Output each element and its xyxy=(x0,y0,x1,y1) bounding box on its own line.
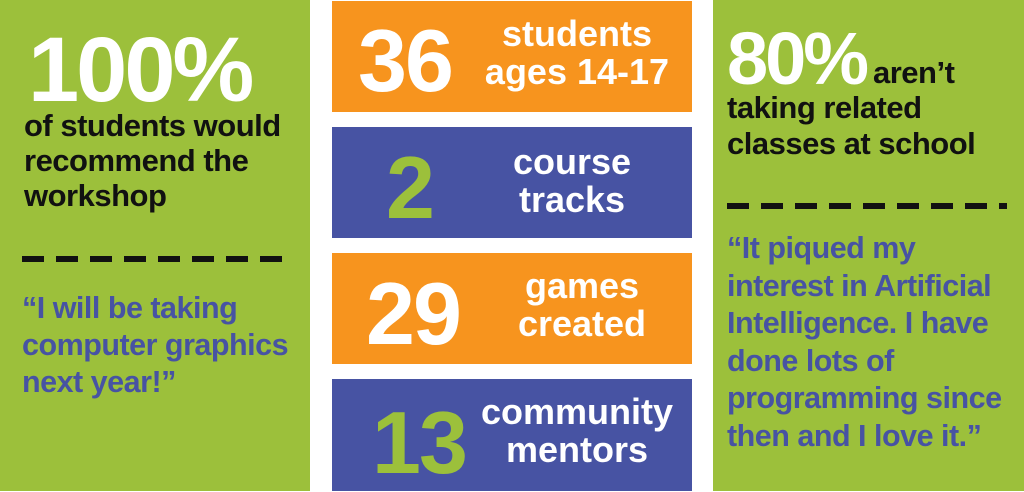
box: 29 games xyxy=(332,253,692,364)
panel: right green: taking related xyxy=(727,90,922,125)
box: 13 mentors: 13 xyxy=(372,393,466,492)
text: recommend: recommend the xyxy=(24,143,248,178)
quote right: “It piqued my xyxy=(727,231,915,265)
box: 2 course tracks: course xyxy=(513,141,631,182)
quote right: interest in Artificial xyxy=(727,268,991,302)
quote right: then and I love it.” xyxy=(727,418,981,452)
quote right: programming since xyxy=(727,381,1002,415)
text: recommend: workshop xyxy=(24,178,166,213)
box: 29 games: created xyxy=(518,303,646,344)
box: 13 mentors xyxy=(332,379,692,491)
box: 13 mentors: mentors xyxy=(506,429,648,470)
text: recommend xyxy=(24,108,281,213)
divider dashes xyxy=(727,203,1007,209)
text: recommend: of students would xyxy=(24,108,281,143)
quote left xyxy=(22,291,288,399)
panel: right green: classes at school xyxy=(727,126,975,161)
box: 36 students xyxy=(332,1,692,112)
quote left: computer graphics xyxy=(22,328,288,362)
box: 2 course tracks: 2 xyxy=(386,138,433,237)
box: 13 mentors: community xyxy=(481,391,673,432)
divider dashes xyxy=(22,256,284,262)
panel: right green xyxy=(713,0,1024,491)
box: 29 games: 29 xyxy=(366,264,460,363)
stat: 100%: 100% xyxy=(28,19,251,121)
stat: 80%: 80% xyxy=(727,17,866,100)
quote left: next year!” xyxy=(22,365,176,399)
box: 29 games: games xyxy=(525,265,639,306)
box: 36 students: 36 xyxy=(358,11,452,110)
quote right: Intelligence. I have xyxy=(727,306,988,340)
box: 36 students: ages 14-17 xyxy=(485,51,669,92)
quote right xyxy=(727,231,1002,452)
text: aren't taking: aren’t xyxy=(873,55,954,90)
panel: left green xyxy=(0,0,310,491)
box: 2 course tracks: tracks xyxy=(519,179,625,220)
box: 36 students: students xyxy=(502,13,652,54)
quote left: “I will be taking xyxy=(22,291,237,325)
box: 2 course tracks xyxy=(332,127,692,238)
quote right: done lots of xyxy=(727,344,894,378)
